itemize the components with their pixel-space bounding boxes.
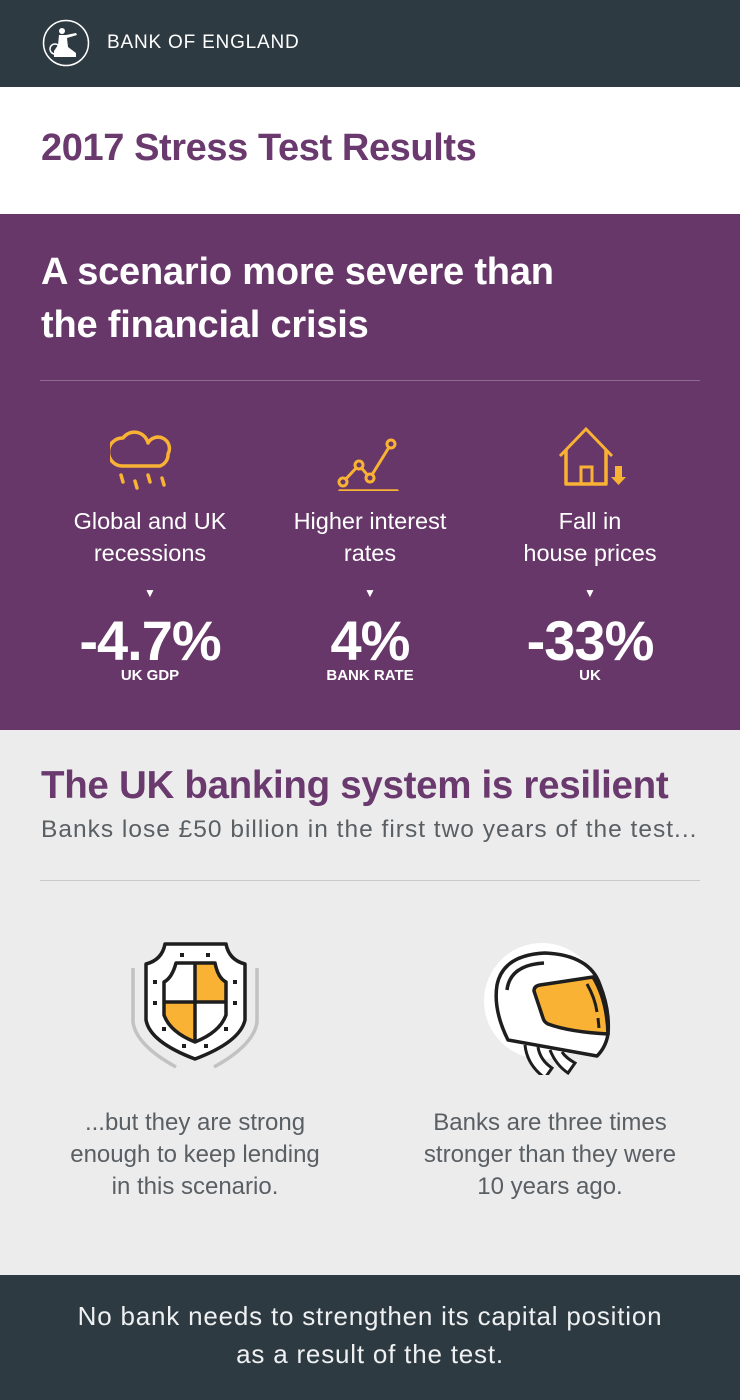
value: -4.7% [79,609,221,672]
label [294,508,446,566]
label: rates [344,540,396,566]
scenario heading: the financial crisis [41,304,369,346]
panel: resilience [0,730,740,1275]
text: lending [70,1109,320,1200]
label: Higher interest [294,508,446,534]
column: recessions [74,430,226,684]
text: three times stronger [424,1109,676,1200]
value: 4% [331,609,409,672]
footer: as a result of the test. [236,1339,504,1369]
label: recessions [94,540,206,566]
logo: Britannia seal [42,20,90,66]
arrow: ▼ [144,586,156,600]
text: three times stronger: Banks are three times [433,1109,667,1136]
arrow: ▼ [364,586,376,600]
label: Fall in [559,508,621,534]
label [523,508,657,566]
text: lending: enough to keep lending [70,1141,320,1168]
footer [0,1275,740,1400]
column: interest rates [294,438,446,684]
icon: line chart [338,438,399,491]
title: 2017 Stress Test Results [41,127,476,169]
panel: scenario [0,214,740,730]
value: -33% [527,609,653,672]
footer: No bank needs to strengthen its capital position [78,1301,662,1331]
text: lending: ...but they are strong [85,1109,305,1136]
icon: shield [131,942,259,1068]
icon: rain cloud [110,430,172,490]
scenario heading [41,251,554,346]
subtitle: Banks lose £50 billion in the first two years of the test... [41,816,697,843]
text: lending: in this scenario. [112,1173,278,1200]
scenario heading: A scenario more severe than [41,251,554,293]
label [74,508,226,566]
arrow: ▼ [584,586,596,600]
icon: helmet [484,943,610,1075]
label: Global and UK [74,508,226,534]
caption: UK GDP [121,667,179,684]
label: house prices [523,540,657,566]
text: three times stronger: stronger than they were [424,1141,676,1168]
header bar [0,0,740,87]
icon: house with down arrow [559,427,626,486]
text: three times stronger: 10 years ago. [477,1173,623,1200]
logo text: BANK OF ENGLAND [107,32,300,53]
caption: BANK RATE [326,667,414,684]
column: house prices [523,427,657,684]
resilience heading: The UK banking system is resilient [41,764,668,807]
caption: UK [579,667,601,684]
